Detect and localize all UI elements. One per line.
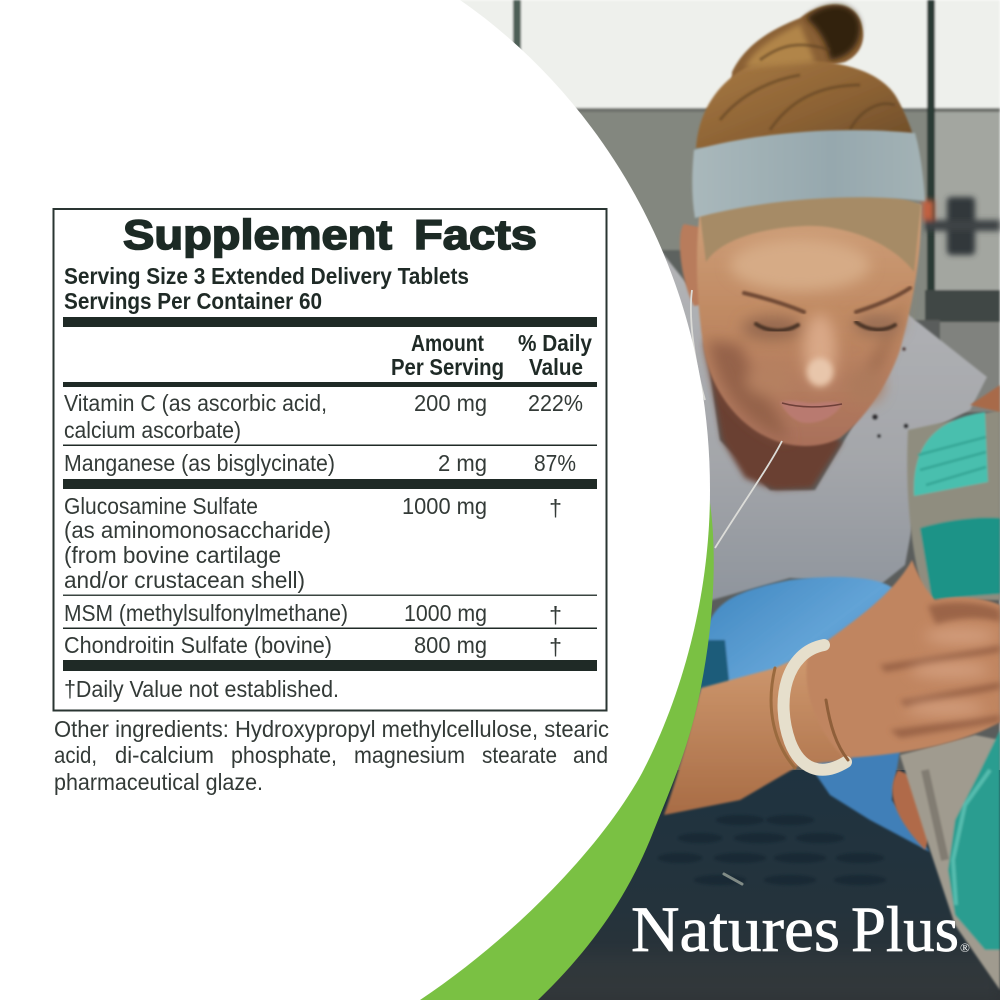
logo: NaturesPlus: [631, 894, 970, 966]
floor mat: [420, 770, 1000, 1000]
green crescent: [400, 490, 714, 1000]
column headers: Per Serving: [391, 354, 504, 380]
other ingredients text: acid,: [54, 742, 97, 768]
row: glucosamine: and/or crustacean shell): [64, 567, 305, 593]
lips: [780, 401, 842, 423]
row: manganese: [64, 450, 576, 476]
row: vitamin c: Vitamin C (as ascorbic acid,: [64, 390, 327, 416]
white panel: [0, 0, 710, 1000]
logo: NaturesPlus: ®: [960, 940, 970, 955]
row: manganese: Manganese (as bisglycinate): [64, 450, 335, 476]
shoe: sole: [907, 410, 1000, 600]
row: glucosamine: 1000 mg: [402, 493, 487, 519]
serving info: [64, 263, 469, 314]
panel: supplement facts table: [54, 209, 606, 710]
hair and bun: [696, 5, 921, 272]
row: vitamin c: [64, 390, 583, 443]
footnote: †Daily Value not established.: [64, 676, 339, 702]
row: chondroitin: 800 mg: [414, 632, 487, 658]
other ingredients text: phosphate,: [231, 742, 337, 768]
row: chondroitin: [64, 632, 562, 660]
column headers: [391, 330, 592, 380]
other ingredients text: magnesium: [354, 742, 465, 768]
column headers: Amount: [411, 330, 484, 356]
title: [123, 211, 537, 258]
other ingredients text: Other ingredients: Hydroxypropyl methylcellulose, stearic: [54, 716, 609, 742]
row: chondroitin: †: [549, 634, 562, 660]
title: Facts: [414, 211, 537, 258]
other ingredients text: stearate: [482, 742, 557, 768]
title: Supplement: [123, 211, 392, 258]
eyebrows: [744, 288, 910, 312]
row: msm: 1000 mg: [404, 600, 487, 626]
neck: [704, 340, 842, 490]
gym background: [440, 0, 1000, 790]
row: chondroitin: Chondroitin Sulfate (bovine): [64, 632, 332, 658]
column headers: % Daily: [518, 330, 592, 356]
face: [697, 205, 921, 446]
other ingredients text: pharmaceutical glaze.: [54, 769, 263, 795]
row: vitamin c: 222%: [528, 390, 583, 416]
row: glucosamine: †: [549, 495, 562, 521]
ear: [680, 224, 706, 306]
barbell weight: [922, 197, 1000, 255]
other ingredients text: and: [573, 742, 608, 768]
other ingredients text: [54, 716, 609, 795]
hand: [806, 560, 1000, 758]
row: vitamin c: calcium ascorbate): [64, 417, 241, 443]
row: glucosamine: (from bovine cartilage: [64, 542, 281, 568]
row: msm: †: [549, 602, 562, 628]
ankle: [892, 770, 945, 850]
serving info: Servings Per Container 60: [64, 288, 322, 314]
eyelashes: [756, 322, 895, 331]
row: msm: MSM (methylsulfonylmethane): [64, 600, 348, 626]
row: glucosamine: [64, 493, 562, 593]
forearm: [664, 650, 852, 815]
logo: NaturesPlus: Natures: [631, 894, 840, 966]
header rule: [63, 382, 597, 387]
row: msm: [64, 600, 562, 628]
column headers: Value: [529, 354, 583, 380]
grey t-shirt: [640, 250, 987, 600]
logo: NaturesPlus: Plus: [851, 894, 959, 966]
arm behind shoe: [970, 385, 1000, 412]
blue leggings: [695, 577, 930, 852]
bracelet: [771, 645, 848, 770]
row: vitamin c: 200 mg: [414, 390, 487, 416]
row: glucosamine: (as aminomonosaccharide): [64, 517, 331, 543]
thick rule: [63, 317, 597, 327]
grey headband: [692, 130, 925, 218]
row: manganese: 87%: [534, 450, 576, 476]
row: glucosamine: Glucosamine Sulfate: [64, 493, 258, 519]
other ingredients text: di-calcium: [115, 742, 214, 768]
serving info: Serving Size 3 Extended Delivery Tablets: [64, 263, 469, 289]
row: manganese: 2 mg: [438, 450, 487, 476]
photo: woman stretching in a gym: [420, 0, 1000, 1000]
shoe: lower foot: [900, 730, 1000, 990]
earphone cable: [691, 290, 782, 548]
